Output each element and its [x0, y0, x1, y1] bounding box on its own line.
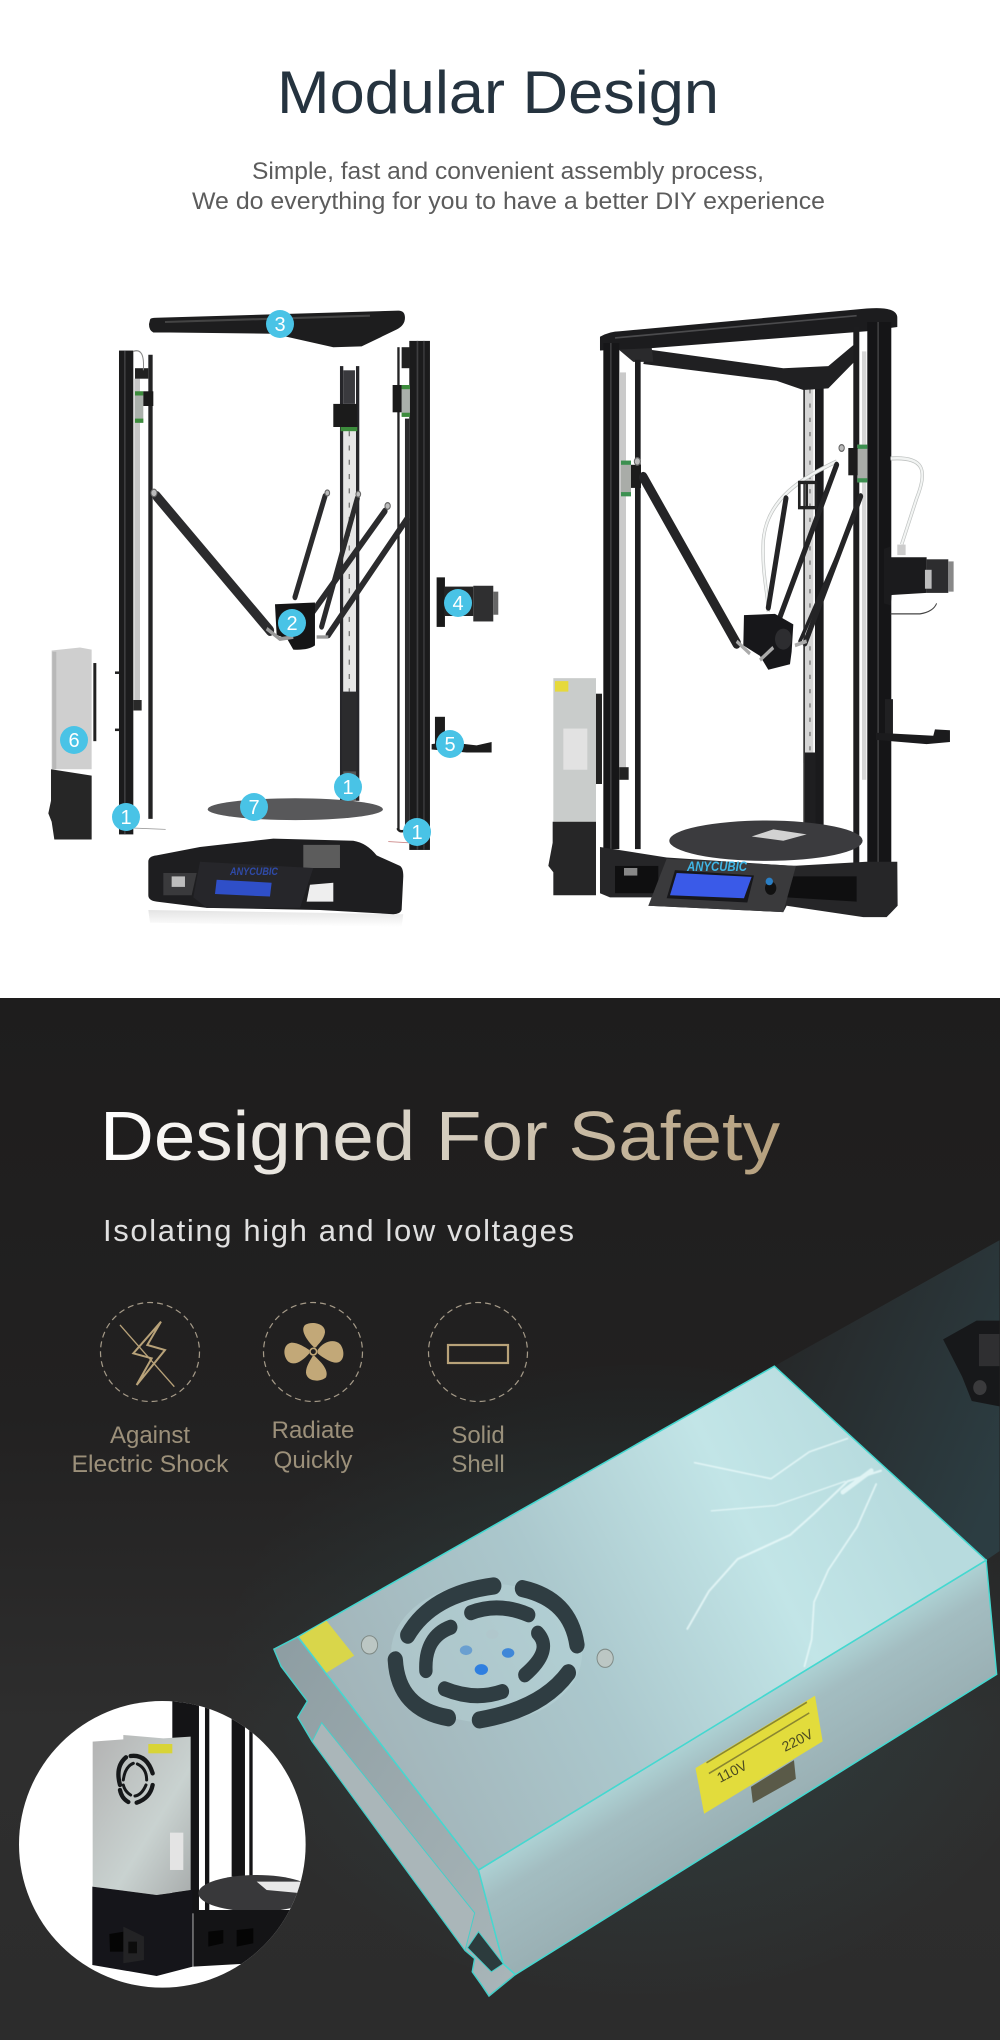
part: extruder — [437, 577, 498, 627]
grill — [118, 1756, 153, 1803]
feature: radiate quickly — [264, 1302, 362, 1474]
badges: numbered parts: 4 — [452, 593, 464, 615]
screws — [361, 1636, 613, 1667]
top face — [298, 1366, 986, 1870]
side face — [478, 1560, 997, 1975]
badges: numbered parts: 2 — [286, 613, 298, 635]
feature: radiate quickly: Quickly — [274, 1447, 352, 1474]
part: base — [148, 839, 403, 927]
power supply body — [93, 1735, 191, 1895]
label text lines — [706, 1702, 809, 1774]
voltage text — [714, 1725, 816, 1786]
feature: solid shell: Solid — [451, 1422, 505, 1449]
subtitle: isolating voltages: Isolating high and low voltages — [103, 1213, 574, 1248]
filament tube — [763, 458, 922, 612]
feature: against electric shock — [72, 1302, 230, 1478]
part: heat bed — [208, 798, 383, 820]
badges: numbered parts: 1 — [411, 822, 423, 844]
badges: numbered parts: 1 — [342, 777, 354, 799]
flange lip — [312, 1723, 475, 1950]
subtitle text block: Simple, fast and convenient assembly process, — [252, 158, 764, 185]
part: arms — [151, 489, 407, 635]
label: printer logo: ANYCUBIC — [686, 858, 748, 874]
yellow corner label — [299, 1621, 354, 1673]
subtitle text block: We do everything for you to have a better DIY experience — [192, 188, 825, 215]
badges: numbered parts: 1 — [120, 807, 132, 829]
badges: numbered parts — [60, 310, 472, 846]
middle column — [803, 385, 824, 826]
rear columns — [172, 1697, 253, 1913]
extruder — [884, 545, 954, 614]
badges: numbered parts: 3 — [274, 314, 286, 336]
feature: radiate quickly: Radiate — [272, 1417, 354, 1444]
voltage switch — [751, 1760, 796, 1803]
yellow label — [148, 1744, 172, 1753]
badges: numbered parts: 7 — [248, 797, 260, 819]
feature: solid shell: Shell — [451, 1451, 505, 1478]
black housing — [92, 1887, 193, 1976]
socket — [109, 1927, 144, 1963]
voltage text: 110V — [714, 1757, 750, 1786]
fan holes — [460, 1629, 514, 1675]
voltage text: 220V — [779, 1725, 816, 1755]
panel: modular design background — [0, 0, 1000, 998]
carriage cluster — [799, 482, 816, 509]
lightning — [687, 1439, 881, 1666]
feature: solid shell — [428, 1302, 528, 1478]
right column — [848, 322, 891, 866]
left column — [603, 343, 641, 849]
icon: crossed lightning — [120, 1322, 174, 1387]
part: top frame — [149, 311, 405, 347]
badges: numbered parts: 6 — [68, 730, 80, 752]
part: power supply — [48, 648, 96, 839]
heat bed and base — [193, 1875, 301, 1967]
badges: numbered parts: 5 — [444, 734, 456, 756]
arms — [634, 445, 861, 643]
base — [600, 847, 898, 917]
spool holder — [876, 699, 950, 744]
feature: against electric shock: Electric Shock — [72, 1451, 230, 1478]
effector — [737, 614, 807, 670]
icon: shell rectangle — [448, 1345, 508, 1363]
inset: printer close-up — [19, 1697, 315, 1988]
yellow voltage label — [695, 1696, 823, 1814]
title: Designed For Safety: Designed For Safety — [100, 1097, 780, 1175]
power supply illustration — [220, 1240, 1000, 2000]
exploded printer diagram — [48, 310, 498, 927]
fan grill — [391, 1583, 582, 1723]
part: right column — [388, 341, 430, 850]
left flange — [274, 1637, 515, 1996]
title: Modular Design: Modular Design — [277, 59, 719, 126]
part: effector — [267, 603, 328, 650]
assembled printer — [548, 308, 954, 917]
feature: against electric shock: Against — [110, 1422, 190, 1449]
heat bed — [669, 821, 863, 861]
label: base logo: ANYCUBIC — [229, 866, 279, 878]
part: middle column — [333, 366, 359, 801]
bracket notch — [467, 1932, 503, 1972]
icon: fan — [284, 1323, 343, 1381]
dark back module — [774, 1240, 1000, 1560]
spec sticker — [170, 1833, 183, 1870]
power supply — [548, 678, 602, 895]
part: spool holder — [432, 717, 492, 752]
part: left column — [115, 351, 166, 834]
panel: designed for safety background — [0, 998, 1000, 2040]
subtitle text block — [192, 158, 825, 215]
top frame — [600, 308, 897, 390]
